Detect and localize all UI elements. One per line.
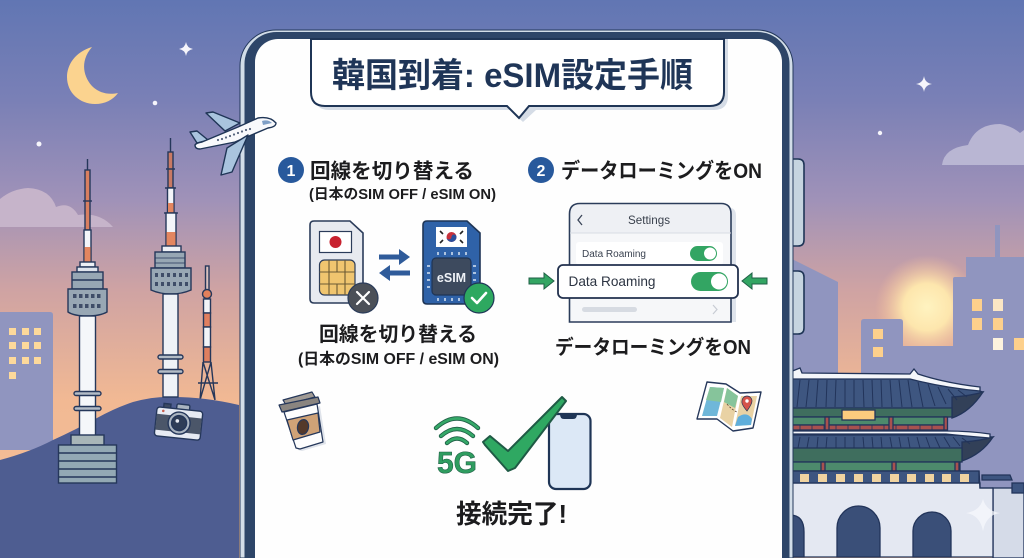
icon: large check mark [483,397,566,471]
step 1 heading: 1 [287,163,296,180]
hill [0,397,239,558]
step 1 caption: (日本のSIM OFF / eSIM ON) [298,350,499,368]
completion text: 接続完了! [456,499,567,529]
sun glow [875,255,979,359]
step 2 heading: 2 [537,163,546,180]
icon: smartphone [549,414,590,489]
icon: 5G signal: 5G [437,445,477,480]
step 2 caption: データローミングをON [555,335,751,359]
icon: coffee cup [279,392,326,451]
step 1 caption [298,324,499,368]
stars [36,42,932,146]
settings screen mockup [558,204,738,322]
settings screen mockup: Data Roaming [568,273,656,289]
sparkle [966,499,1000,531]
phone side buttons [792,159,804,334]
upper roof [790,378,983,409]
lower roof [790,435,993,449]
icon: Korean eSIM card: eSIM [437,271,466,285]
side wall [982,475,1012,480]
icon: camera [154,402,203,440]
icon: swap arrows [379,249,410,281]
icon: 5G signal [436,418,478,480]
airplane [190,112,276,175]
crescent moon [67,47,118,104]
icon: Japanese SIM card [310,221,378,313]
city building left [0,312,53,450]
palace gate [790,368,1024,558]
step 1 caption: 回線を切り替える [319,324,477,346]
step 1 heading: (日本のSIM OFF / eSIM ON) [309,186,496,203]
arrow right [742,273,767,289]
wall [790,483,993,557]
step 2 heading: データローミングをON [561,159,762,183]
title speech bubble [311,39,728,122]
arches [837,506,880,557]
settings screen mockup: Settings [628,213,670,227]
Seoul tower left [58,159,116,483]
arrow left [529,273,554,289]
title: 韓国到着: eSIM設定手順 [332,57,693,95]
cloud right [942,124,1024,165]
phone frame [240,30,793,558]
cloud left [0,188,113,227]
right city skyline [790,225,1024,500]
settings screen mockup: Data Roaming [582,249,646,260]
radio tower [198,266,218,400]
highlighted data roaming row [558,265,738,298]
icon: folded map [697,382,761,431]
step 1 heading: 回線を切り替える [310,160,474,183]
icon: Korean eSIM card [423,221,494,313]
Seoul tower centre [151,138,191,397]
step 1 heading [278,157,496,203]
